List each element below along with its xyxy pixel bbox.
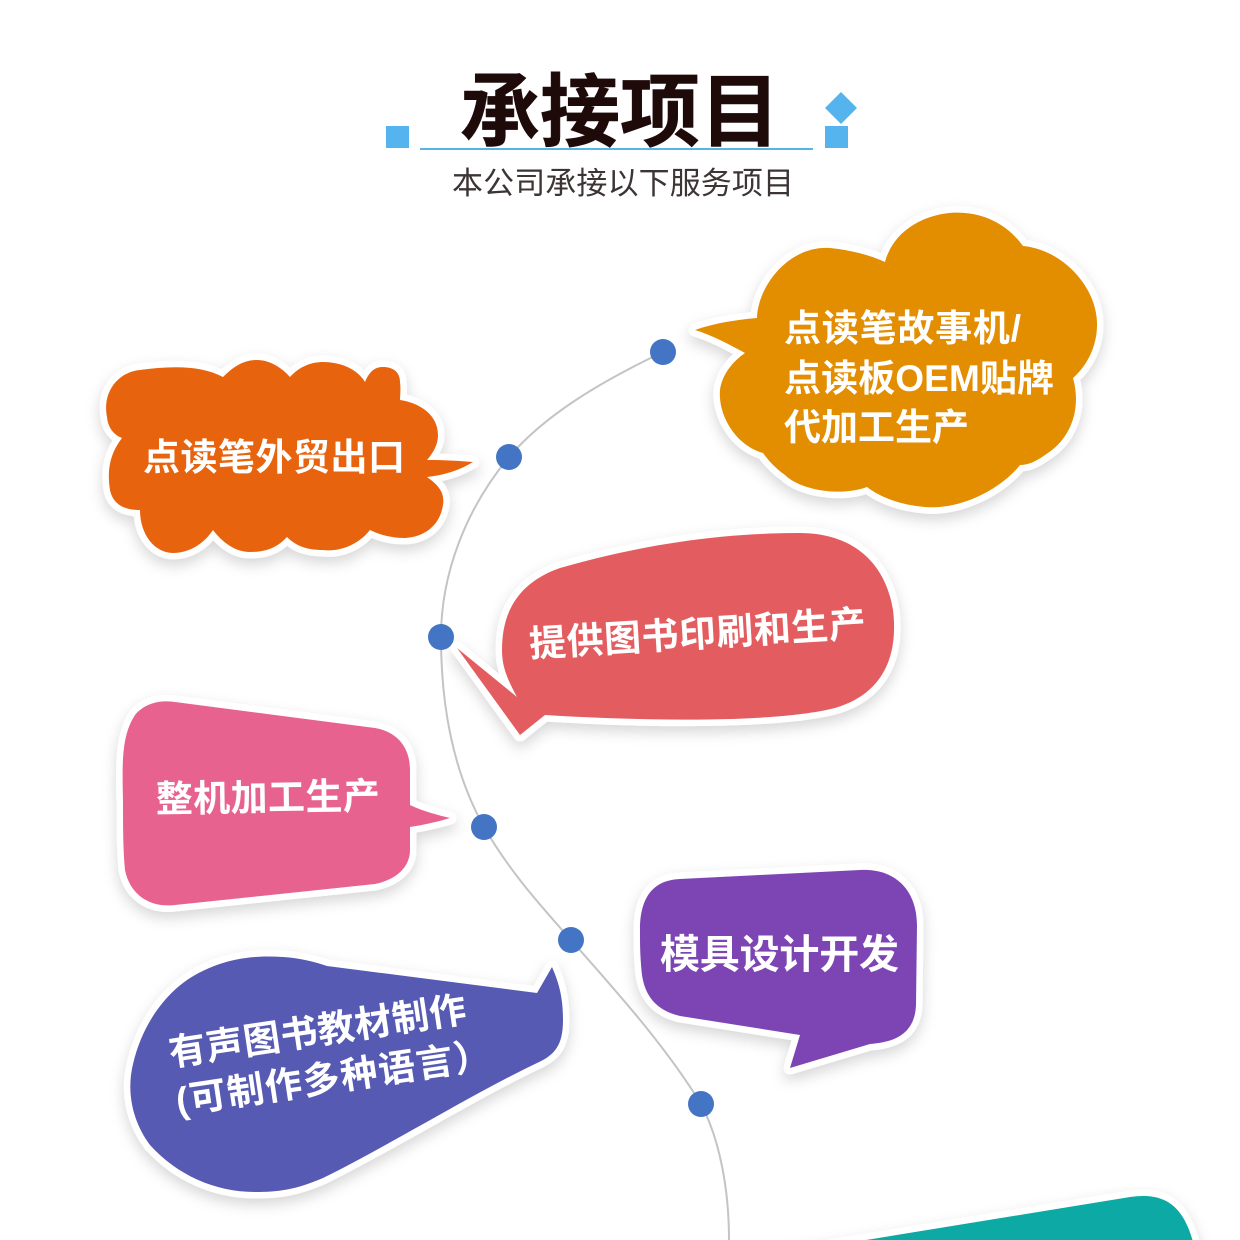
icon: left square (386, 126, 409, 148)
bubble text: 提供图书印刷和生产 (528, 603, 867, 665)
bubble: book printing red (457, 533, 894, 735)
bubble text: 点读笔外贸出口 (143, 437, 405, 478)
bubble text: 代加工生产 (784, 407, 969, 448)
bubble text: 点读笔故事机/ (784, 308, 1021, 349)
bubble text: 模具设计开发 (660, 933, 899, 977)
bubble text: (可制作多种语言） (173, 1034, 494, 1122)
bubble: mould design purple (640, 870, 917, 1068)
icon: right square and diamond (825, 92, 857, 148)
title block (386, 68, 857, 201)
bubble: OEM orange cloud (695, 213, 1097, 507)
bubble text (784, 308, 1054, 448)
bubble: export orange-red cloud (106, 360, 473, 553)
timeline dots (428, 339, 714, 1117)
bubble: assembly pink (123, 701, 450, 905)
bubble text: 点读板OEM贴牌 (784, 358, 1054, 399)
subtitle: 本公司承接以下服务项目 (452, 166, 794, 201)
bubble text: 整机加工生产 (156, 776, 380, 820)
bubble: teal partial (780, 1196, 1195, 1240)
title: 承接项目 (460, 68, 780, 157)
timeline curve (441, 352, 729, 1240)
bubble: audio books blue (130, 956, 563, 1192)
bubble text: 有声图书教材制作 (166, 989, 469, 1074)
title underline (420, 148, 813, 150)
